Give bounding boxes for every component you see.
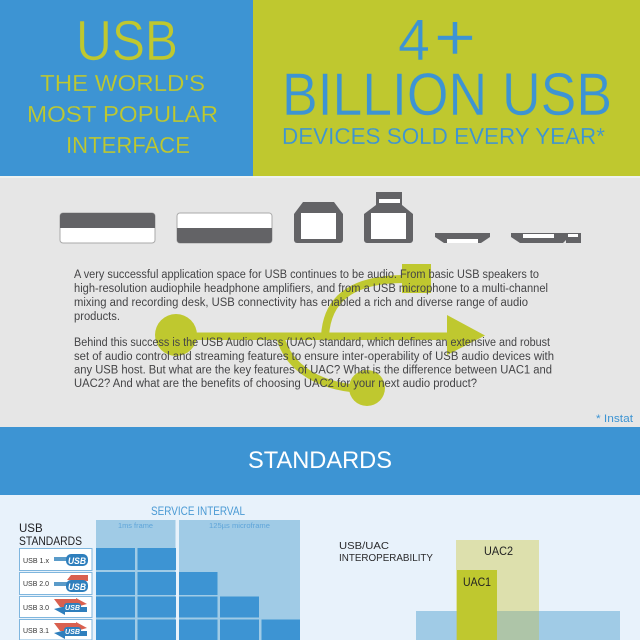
row: USB 1.x: USB bbox=[68, 556, 86, 567]
stat: 4+: 4 bbox=[398, 8, 430, 73]
text block: intro paragraph 2: Behind this success is the USB Audio Class (UAC) standard, which defines an extensive and robust bbox=[74, 337, 551, 349]
panel: billion devices bbox=[253, 0, 640, 176]
text block: intro paragraph 2: any USB host. But what are the key features of UAC? What is the difference between UAC1 and bbox=[74, 364, 552, 376]
row: USB 2.0 bbox=[20, 572, 92, 594]
text block: intro paragraph 1: A very successful application space for USB continues to be audio. From basic USB speakers to bbox=[74, 269, 539, 281]
icon: USB type B SuperSpeed connector bbox=[364, 192, 413, 243]
row: USB 3.0: USB 3.0 bbox=[23, 603, 49, 612]
banner: standards: STANDARDS bbox=[248, 447, 392, 474]
icon: USB type B connector bbox=[294, 202, 343, 243]
block: UAC2: UAC2 bbox=[484, 546, 513, 558]
stat caption: DEVICES SOLD EVERY YEAR* bbox=[282, 123, 605, 149]
heading: USB standards: STANDARDS bbox=[19, 536, 82, 548]
block: UAC1 bbox=[457, 570, 497, 640]
subheading line: most popular: MOST POPULAR bbox=[27, 101, 218, 127]
chart: UAC interoperability bbox=[416, 540, 620, 640]
column: 125us microframe bbox=[179, 520, 300, 640]
row: USB 1.x: USB 1.x bbox=[23, 556, 49, 565]
icon: micro USB 3 connector bbox=[511, 233, 581, 243]
column: 1ms frame: 1ms frame bbox=[118, 521, 153, 530]
text block: intro paragraph 1: high-resolution audiophile headphone amplifiers, and from a USB microphone to a multi-channel bbox=[74, 283, 548, 295]
text block: intro paragraph 1 bbox=[74, 269, 548, 323]
row: USB 3.0 bbox=[20, 596, 92, 618]
panel: connectors and intro bbox=[0, 178, 640, 427]
column: 1ms frame bbox=[96, 520, 176, 640]
heading: USB: USB bbox=[76, 9, 178, 73]
subheading line: interface: INTERFACE bbox=[66, 132, 190, 158]
heading: USB standards: USB bbox=[19, 523, 43, 535]
row: USB 2.0: USB bbox=[68, 582, 86, 593]
stat: 4+: + bbox=[434, 0, 476, 74]
panel: USB title bbox=[0, 0, 253, 176]
text block: intro paragraph 2 bbox=[74, 337, 554, 390]
base: USB band bbox=[416, 611, 620, 640]
stat: 4+ bbox=[398, 0, 476, 74]
bars bbox=[96, 548, 300, 640]
text block: intro paragraph 1: mixing and recording desk, USB connectivity has enabled a rich and diverse range of audio bbox=[74, 297, 528, 309]
heading: USB/UAC interoperability: USB/UAC bbox=[339, 540, 389, 552]
heading: USB standards bbox=[19, 523, 82, 548]
icon: USB trident symbol bbox=[155, 264, 485, 406]
row: USB 3.0: USB bbox=[65, 603, 81, 612]
icon: USB type A connector inverted bbox=[177, 213, 272, 243]
row: USB 3.1: USB 3.1 bbox=[23, 626, 49, 635]
heading: USB/UAC interoperability bbox=[339, 540, 433, 564]
row: USB 2.0: USB 2.0 bbox=[23, 579, 49, 588]
subheading line: the world's: THE WORLD'S bbox=[40, 70, 205, 96]
heading: USB/UAC interoperability: INTEROPERABILITY bbox=[339, 552, 433, 564]
source note: * Instat bbox=[596, 413, 633, 425]
icon: micro USB connector bbox=[435, 233, 490, 243]
chart: service interval bbox=[96, 506, 300, 640]
column: 125us microframe: 125µs microframe bbox=[209, 521, 270, 530]
row: USB 3.1: USB bbox=[65, 627, 81, 636]
row: USB 3.1 bbox=[20, 620, 92, 640]
block: UAC1: UAC1 bbox=[463, 577, 491, 589]
row: USB 1.x bbox=[20, 548, 92, 570]
block: UAC2 bbox=[456, 540, 539, 640]
chart title: SERVICE INTERVAL bbox=[151, 506, 246, 518]
text block: intro paragraph 1: products. bbox=[74, 311, 120, 323]
icon: USB type A connector bbox=[60, 213, 155, 243]
banner: standards bbox=[0, 427, 640, 495]
text block: intro paragraph 2: UAC2? And what are the benefits of choosing UAC2 for your next audio product? bbox=[74, 378, 477, 390]
text block: intro paragraph 2: set of audio control and streaming features to ensure inter-operability of USB audio devices with bbox=[74, 351, 554, 363]
